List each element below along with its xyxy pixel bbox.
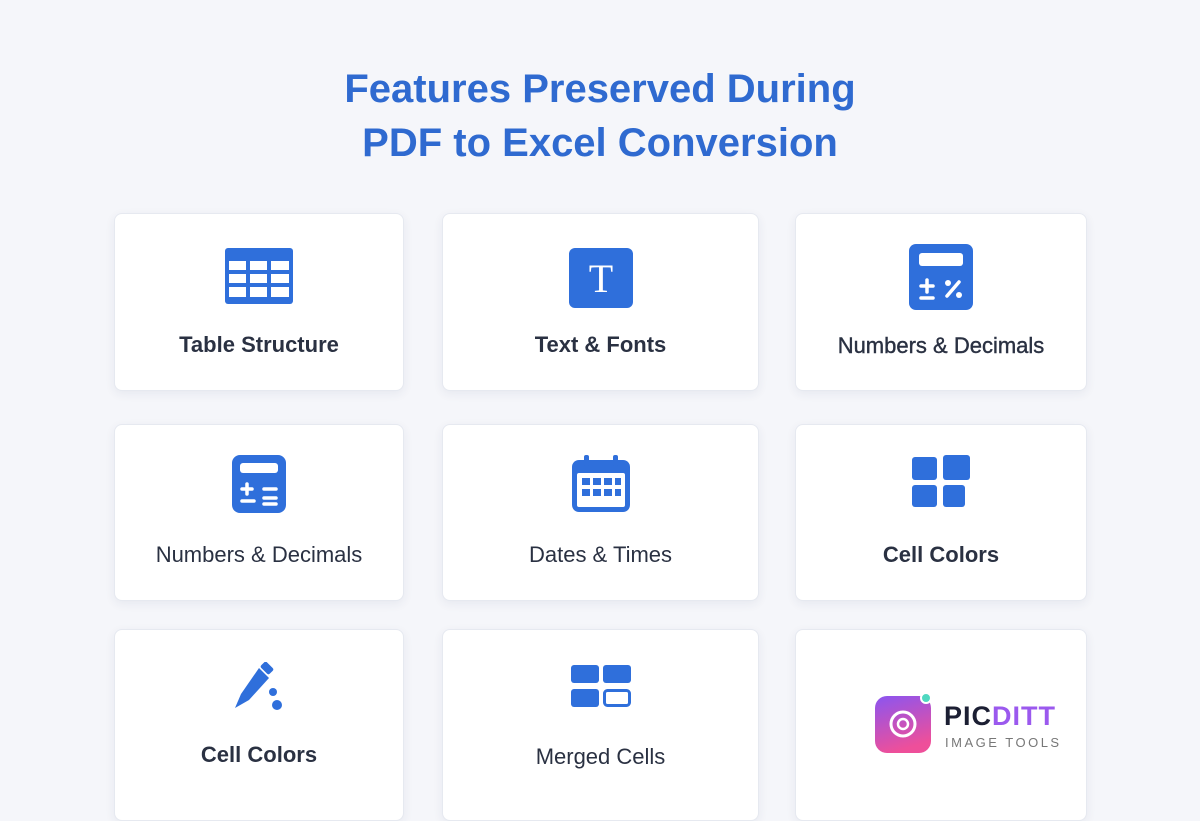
icon: merged cells [571, 665, 631, 707]
card: logo [795, 629, 1087, 821]
logo: picditt [875, 694, 1062, 753]
card: cell colors 2 [114, 629, 404, 821]
label: Cell Colors [883, 542, 999, 567]
icon: calendar [572, 455, 630, 512]
icon: squares [912, 455, 970, 507]
card: table structure [114, 213, 404, 391]
label: Numbers & Decimals [156, 542, 362, 567]
card: numbers & decimals 1 [795, 213, 1087, 391]
card: text & fonts [442, 213, 759, 391]
label: Text & Fonts [535, 332, 666, 357]
icon: calculator [909, 244, 973, 310]
card: merged cells [442, 629, 759, 821]
label: Dates & Times [529, 542, 672, 567]
icon: T: T [588, 256, 613, 301]
title: Features Preserved During [344, 67, 856, 111]
icon: calculator [232, 455, 286, 513]
label: Table Structure [179, 332, 339, 357]
card: numbers & decimals 2 [114, 424, 404, 601]
icon: paint brush [235, 662, 282, 710]
card: dates & times [442, 424, 759, 601]
logo: picditt: PICDITT [944, 701, 1056, 731]
title [344, 67, 856, 165]
title: PDF to Excel Conversion [362, 121, 838, 165]
label: Merged Cells [536, 744, 665, 769]
label: Cell Colors [201, 742, 317, 767]
icon: table [225, 248, 293, 304]
icon: T [569, 248, 633, 308]
logo: picditt: IMAGE TOOLS [945, 735, 1062, 750]
label: Numbers & Decimals [838, 333, 1044, 358]
card: cell colors 1 [795, 424, 1087, 601]
